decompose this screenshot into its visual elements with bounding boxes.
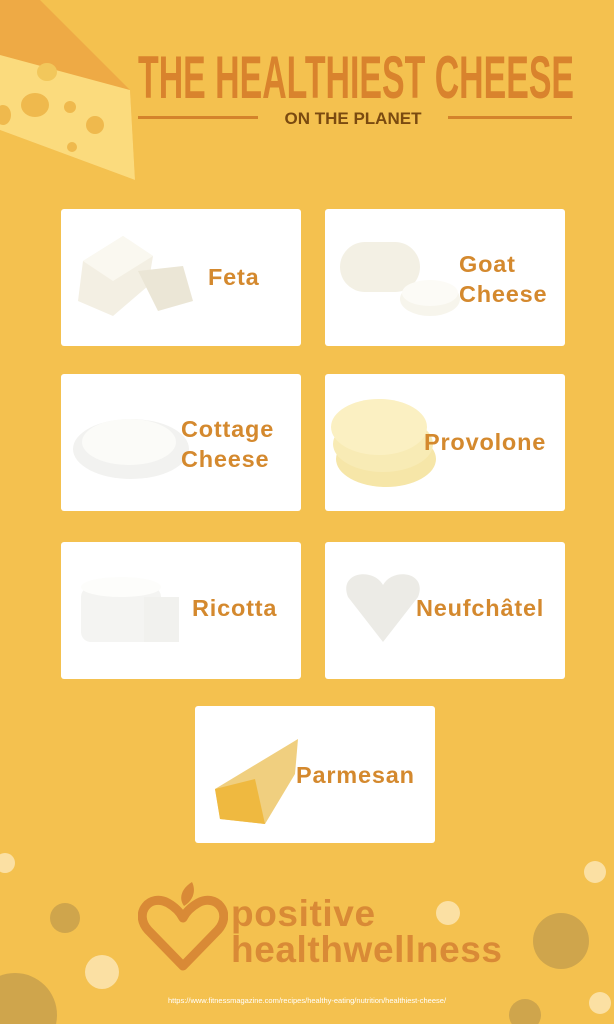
label: Goat (459, 251, 516, 277)
card: Provolone (325, 374, 565, 511)
icon: provolone (331, 399, 436, 487)
title: ON THE PLANET (285, 109, 422, 128)
card: Neufchâtel (325, 542, 565, 679)
brand text: positive (231, 893, 376, 934)
icon: cottage cheese (73, 419, 189, 479)
label: Parmesan (296, 762, 415, 788)
card: Cottage Cheese (61, 374, 301, 511)
label: Cheese (459, 281, 547, 307)
card: Goat Cheese (325, 209, 565, 346)
card: Ricotta (61, 542, 301, 679)
icon: neufchatel heart (346, 574, 420, 642)
brand text: healthwellness (231, 929, 503, 970)
icon: goat cheese (340, 242, 460, 316)
label: Cottage (181, 416, 274, 442)
label (459, 251, 547, 307)
source url: https://www.fitnessmagazine.com/recipes/healthy-eating/nutrition/healthiest-cheese/ (168, 996, 446, 1005)
label: Cheese (181, 446, 269, 472)
label: Feta (208, 264, 260, 290)
label (181, 416, 274, 472)
icon: ricotta (81, 590, 179, 642)
icon: feta (78, 236, 193, 316)
decorative cheese wedge (0, 0, 135, 180)
icon: apple heart (138, 882, 228, 970)
label: Ricotta (192, 595, 277, 621)
card: Parmesan (195, 706, 435, 843)
icon: parmesan (215, 739, 298, 824)
label: Provolone (424, 429, 546, 455)
decorative dots (0, 853, 611, 1024)
brand text (231, 893, 503, 970)
logo (138, 882, 503, 970)
card: Feta (61, 209, 301, 346)
label: Neufchâtel (416, 595, 544, 621)
